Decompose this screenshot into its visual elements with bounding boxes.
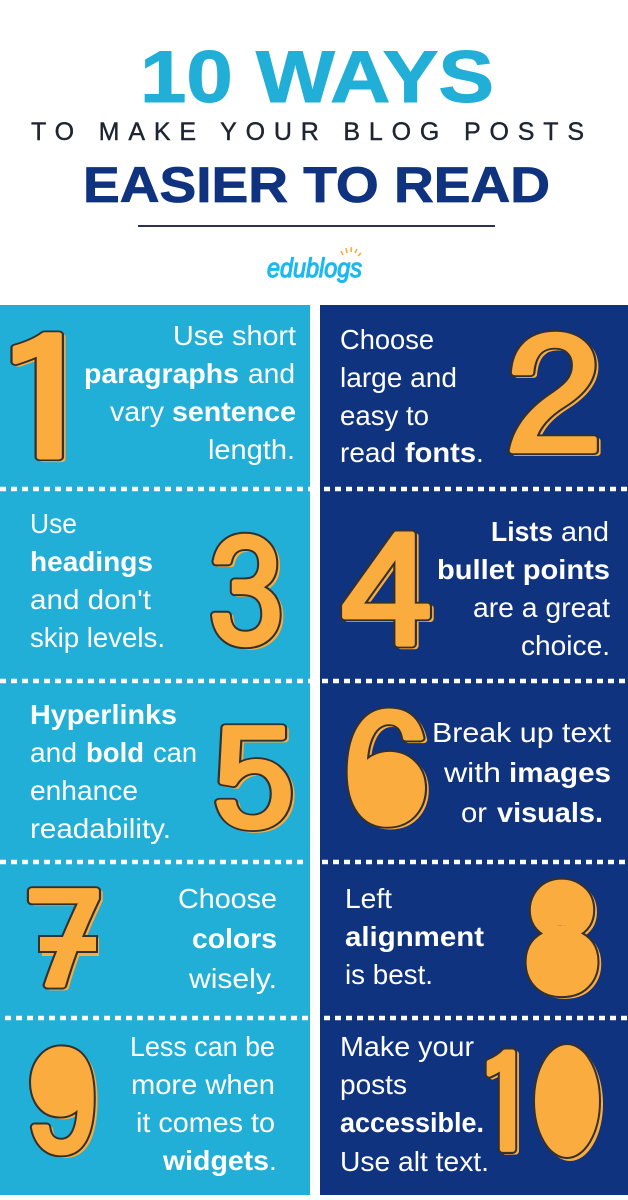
text: tip 6: visuals. [497,797,603,828]
text: tip 8 [345,883,484,990]
numeral 4: 4 [343,516,435,673]
text: tip 6: Break up text [432,717,611,748]
text: tip 3 [30,508,165,653]
numeral 10: 10 [478,1036,602,1175]
text: tip 10: Make your [340,1031,474,1062]
numeral 4: 4 [340,514,432,671]
text: tip 5: can [153,737,197,768]
text: tip 2: large and [340,362,457,393]
panel: right column background [320,305,628,1195]
text: tip 9: it comes to [136,1107,275,1138]
text: tip 1: paragraphs [84,358,239,389]
subheading: to make your blog posts: TO MAKE YOUR BLOG POSTS [31,118,584,146]
text: tip 6: with [443,757,501,788]
tip 10 [340,1031,603,1177]
panel: left column background [0,305,310,1195]
numeral 9: 9 [26,1035,98,1175]
text: tip 4: are a great [473,592,610,623]
logo: edublogs: edublogs [267,253,362,283]
text: tip 2: easy to [340,400,429,431]
numeral 7: 7 [24,873,104,1008]
text: tip 1 [84,320,296,465]
numeral 3: 3 [209,521,283,667]
text: tip 1: length. [208,434,295,465]
title block [31,37,584,213]
numeral 2: 2 [505,317,603,479]
tip 7 [24,873,277,1010]
text: tip 3: Use [30,508,77,539]
numeral 10: 10 [475,1034,599,1173]
numeral 10: 10 [475,1034,599,1173]
numeral 3: 3 [209,521,283,667]
text: tip 5: readability. [30,813,171,844]
tip 3 [30,508,286,669]
tip 6 [342,694,611,849]
text: tip 5: enhance [30,775,138,806]
text: tip 8: Left [345,883,392,914]
text: tip 9: widgets [162,1145,269,1176]
text: tip 7 [178,883,277,994]
numeral 9: 9 [26,1035,98,1175]
text: tip 2 [340,324,484,468]
text: tip 1: and [248,358,295,389]
text: tip 5: Hyperlinks [30,699,177,730]
tip 4 [340,514,610,673]
numeral 7: 7 [24,873,104,1008]
numeral 5: 5 [210,709,296,849]
numeral 9: 9 [29,1037,101,1177]
numeral 2: 2 [505,317,603,479]
text: tip 1: sentence [172,396,296,427]
text: tip 6: or [461,797,487,828]
text: tip 3: skip levels. [30,622,165,653]
numeral 6: 6 [342,694,430,847]
text: tip 9: Less can be [130,1031,275,1062]
numeral 5: 5 [213,711,299,851]
text: tip 4: bullet points [437,554,610,585]
text: tip 4: and [561,516,609,547]
text: tip 7: colors [192,923,277,954]
text: tip 7: Choose [178,883,277,914]
text: tip 3: and don't [30,584,151,615]
text: tip 2: . [476,437,484,468]
tip 5 [30,699,299,851]
text: tip 4: choice. [521,630,610,661]
text: tip 4 [437,516,610,661]
text: tip 5 [30,699,197,844]
text: tip 1: vary [110,396,164,427]
text: tip 2: fonts [405,437,476,468]
text: tip 6 [432,717,611,828]
tip 1 [0,312,296,489]
numeral 5: 5 [210,709,296,849]
numeral 8: 8 [524,867,600,1017]
numeral 2: 2 [508,319,606,481]
text: tip 1: Use short [173,320,296,351]
text: tip 9: more when [131,1069,275,1100]
numeral 6: 6 [345,696,433,849]
text: tip 5: bold [86,737,144,768]
text: tip 2: Choose [340,324,434,355]
numeral 8: 8 [527,869,603,1019]
numeral 8: 8 [524,867,600,1017]
heading: 10 ways: 10 WAYS [140,37,494,118]
text: tip 10 [340,1031,489,1177]
text: tip 10: posts [340,1069,407,1100]
text: tip 6: images [509,757,611,788]
tip 8 [345,867,603,1019]
text: tip 10: Use alt text. [340,1146,489,1177]
heading: easier to read: EASIER TO READ [83,157,550,213]
text: tip 3: headings [30,546,153,577]
text: tip 5: and [30,737,77,768]
text: tip 9: . [269,1145,277,1176]
text: tip 10: accessible. [340,1107,484,1138]
numeral 6: 6 [342,694,430,847]
text: tip 9 [130,1031,277,1176]
tip 2 [340,317,606,481]
tip 9 [26,1031,277,1177]
text: tip 7: wisely. [188,963,277,994]
text: tip 2: read [340,437,396,468]
numeral 3: 3 [212,523,286,669]
text: tip 8: is best. [345,959,433,990]
numeral 7: 7 [27,875,107,1010]
text: tip 8: alignment [345,921,484,952]
numeral 4: 4 [340,514,432,671]
text: tip 4: Lists [491,516,553,547]
